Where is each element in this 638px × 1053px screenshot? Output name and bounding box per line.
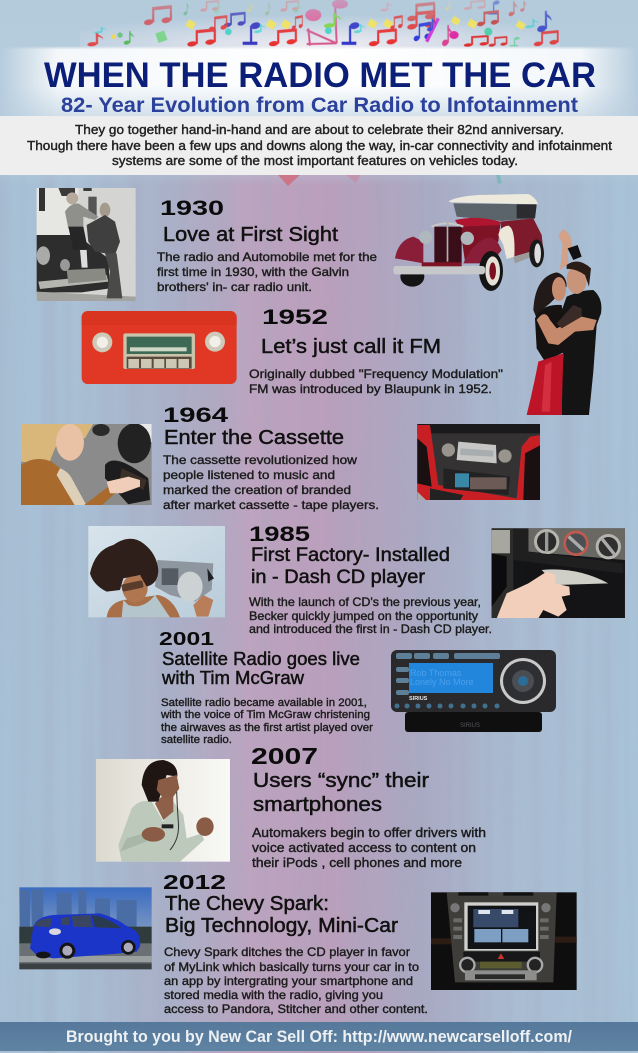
text: 2007 body: voice activated access to content on bbox=[252, 841, 476, 855]
year: 1964: 1964 bbox=[163, 404, 228, 427]
year: 2001 bbox=[159, 628, 360, 688]
year: 2007 bbox=[251, 743, 429, 816]
heading: Satellite Radio goes live with Tim McGraw: Satellite Radio goes live bbox=[162, 648, 360, 669]
intro panel: Though there have been a few ups and downs along the way, in-car connectivity and infotainment bbox=[27, 139, 613, 153]
year: 1985 bbox=[249, 523, 450, 588]
text: 1964 body: people listened to music and bbox=[163, 468, 335, 482]
year: 1952 bbox=[261, 306, 441, 358]
heading: Love at First Sight: Love at First Sight bbox=[163, 224, 338, 246]
text: 1930 body: first time in 1930, with the Galvin bbox=[157, 265, 349, 279]
text: 2012 body: stored media with the radio, giving you bbox=[164, 988, 383, 1002]
text: 1930 body bbox=[157, 250, 377, 294]
year: 1985: 1985 bbox=[249, 523, 310, 546]
text: 1930 body: The radio and Automobile met for the bbox=[157, 250, 377, 264]
text: 2007 body: Automakers begin to offer drivers with bbox=[252, 826, 486, 840]
heading: Let's just call it FM: Let’s just call it FM bbox=[261, 335, 441, 358]
year: 2012 bbox=[163, 872, 398, 937]
text: 1964 body: The cassette revolutionized how bbox=[163, 453, 357, 467]
year: 1930: 1930 bbox=[160, 197, 224, 220]
text: 2012 body: of MyLink which basically turns your car in to bbox=[164, 960, 419, 974]
intro panel: They go together hand-in-hand and are about to celebrate their 82nd anniversary. bbox=[75, 123, 564, 137]
text: 1964 body: marked the creation of branded bbox=[163, 483, 351, 497]
text: 2012 body bbox=[164, 945, 428, 1016]
text: 1952 body bbox=[249, 367, 503, 396]
text: 2012 body: Chevy Spark ditches the CD player in favor bbox=[164, 945, 410, 959]
music note remnants below intro bbox=[278, 175, 502, 186]
image: vintage red car bbox=[393, 194, 544, 291]
title: WHEN THE RADIO MET THE CAR bbox=[44, 56, 596, 95]
intro panel bbox=[0, 116, 638, 175]
footer bar bbox=[0, 1022, 638, 1051]
intro panel: systems are some of the most important features on vehicles today. bbox=[112, 154, 518, 168]
photo: infotainment console bbox=[431, 892, 577, 990]
photo: man with afro and boombox bbox=[88, 526, 226, 617]
text: 2001 body: with the voice of Tim McGraw christening bbox=[160, 709, 370, 721]
heading: Users sync their smartphones: smartphones bbox=[253, 793, 382, 816]
text: 2007 body bbox=[252, 826, 486, 870]
heading: The Chevy Spark: Big Technology, Mini-Car: Big Technology, Mini-Car bbox=[165, 915, 398, 937]
year: 2001: 2001 bbox=[159, 628, 214, 649]
photo: woman with cassette bbox=[21, 423, 152, 506]
text: 1964 body bbox=[163, 453, 379, 512]
text: 1985 body bbox=[249, 595, 492, 636]
photo: woman with smartphone bbox=[96, 759, 230, 862]
year: 1952: 1952 bbox=[262, 306, 328, 329]
footer bar: Brought to you by New Car Sell Off: http://www.newcarselloff.com/ bbox=[66, 1028, 572, 1046]
heading: Users sync their smartphones bbox=[253, 769, 429, 816]
text: 2007 body: their iPods , cell phones and more bbox=[252, 856, 462, 870]
photo: blue Chevy Spark bbox=[19, 887, 152, 969]
year: 1930 bbox=[160, 197, 338, 246]
image: dancing couple bbox=[527, 229, 601, 415]
text: 2012 body: an app by intergrating your smartphone and bbox=[164, 974, 413, 988]
heading: The Chevy Spark: Big Technology, Mini-Car bbox=[165, 893, 398, 937]
photo: CD dash bbox=[492, 528, 625, 618]
year: 2012: 2012 bbox=[163, 872, 226, 894]
image: Sirius satellite radio: Rob Thomas bbox=[410, 668, 462, 678]
text: 1952 body: Originally dubbed "Frequency Modulation" bbox=[249, 367, 503, 381]
photo: 1930 couple on car bbox=[37, 188, 136, 301]
text: 1952 body: FM was introduced by Blaupunk in 1952. bbox=[249, 382, 492, 396]
text: 1930 body: brothers' in- car radio unit. bbox=[157, 280, 312, 294]
text: 1985 body: Becker quickly jumped on the opportunity bbox=[249, 609, 478, 623]
heading: Satellite Radio goes live with Tim McGraw: with Tim McGraw bbox=[161, 667, 305, 688]
photo: red radio 1952 bbox=[82, 311, 237, 384]
text: 1964 body: after market cassette - tape players. bbox=[163, 498, 379, 512]
heading: Enter the Cassette: Enter the Cassette bbox=[164, 427, 344, 449]
image: Sirius satellite radio: SIRIUS bbox=[460, 723, 480, 729]
text: 2012 body: access to Pandora, Stitcher and other content. bbox=[164, 1002, 428, 1016]
text: 1985 body: With the launch of CD's the previous year, bbox=[249, 595, 481, 609]
heading: Satellite Radio goes live with Tim McGraw bbox=[161, 648, 360, 688]
heading: The Chevy Spark: Big Technology, Mini-Car: The Chevy Spark: bbox=[165, 893, 329, 915]
heading: First Factory- Installed in - Dash CD player bbox=[251, 544, 450, 588]
image: Sirius satellite radio: Lonely No More bbox=[410, 677, 474, 687]
text: 2001 body: satellite radio. bbox=[161, 734, 232, 746]
title glow panel bbox=[0, 46, 638, 118]
image: Sirius satellite radio bbox=[391, 650, 556, 732]
text: 2001 body: Satellite radio became available in 2001, bbox=[161, 697, 367, 709]
text: 2001 body: the airwaves as the first artist played over bbox=[161, 722, 373, 734]
text: 1985 body: and introduced the first in - Dash CD player. bbox=[249, 622, 492, 636]
subtitle: 82- Year Evolution from Car Radio to Infotainment bbox=[61, 94, 578, 117]
text: 2001 body bbox=[160, 697, 373, 746]
heading: First Factory- Installed in - Dash CD player: First Factory- Installed bbox=[251, 544, 450, 566]
photo: red dash with radio bbox=[417, 424, 541, 501]
heading: First Factory- Installed in - Dash CD player: in - Dash CD player bbox=[251, 566, 426, 588]
year: 2007: 2007 bbox=[251, 743, 318, 769]
icon: music notes bbox=[86, 0, 559, 47]
heading: Users sync their smartphones: Users “sync” their bbox=[253, 769, 429, 792]
year: 1964 bbox=[163, 404, 344, 449]
image: Sirius satellite radio: SIRIUS bbox=[409, 696, 428, 702]
